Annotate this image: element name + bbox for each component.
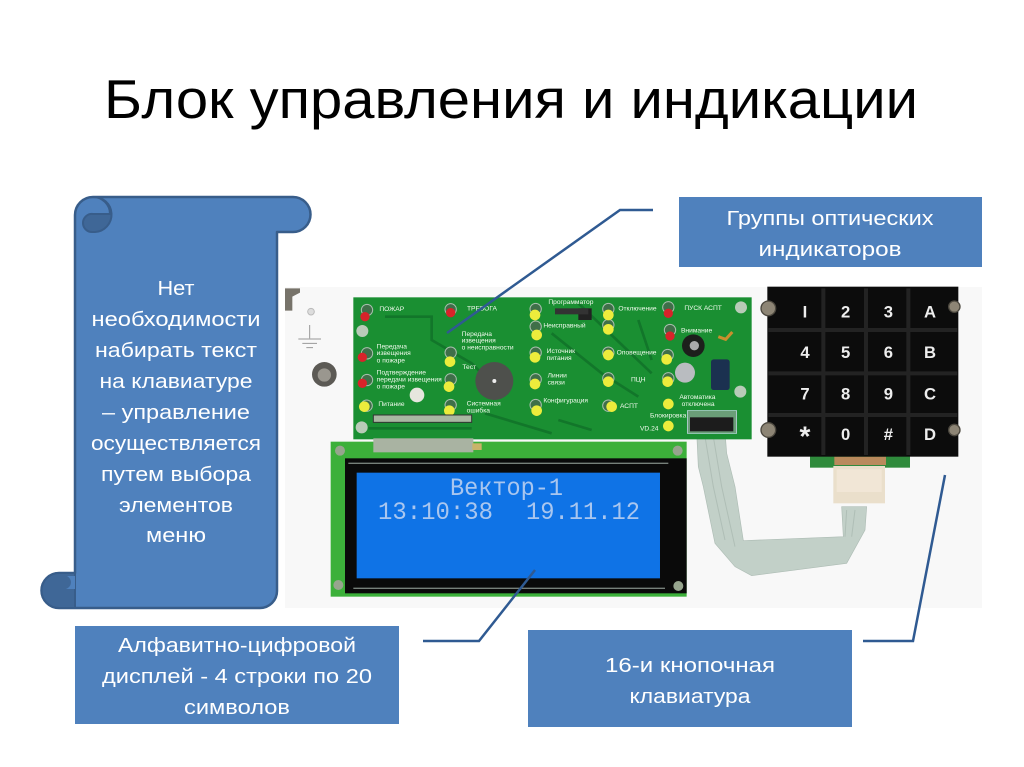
bottom curl [42,573,75,608]
callout: 16-key keypad: клавиатура [630,685,751,708]
panel: scroll callout [42,197,310,608]
board labels: Подтверждение [377,369,426,376]
photo background [285,287,982,608]
16-key keypad: 5 [841,343,850,362]
connector and small board [810,455,910,468]
board labels: АСПТ [620,403,638,410]
scroll text [91,277,261,547]
16-key keypad: # [884,425,893,444]
ribbon cable [697,432,867,576]
callout: optical indicator groups: индикаторов [758,238,902,261]
16-key keypad [761,287,960,503]
key labels: I [803,302,807,321]
callout: 16-key keypad: 16-и кнопочная [605,654,775,677]
leader line: display [423,570,535,641]
board labels: Передача [377,343,407,350]
board labels: Отключение [618,305,657,312]
board labels: питания [547,355,572,362]
mounting holes [356,301,747,433]
scroll shape [42,197,310,608]
scroll text: осуществляется [91,432,261,455]
board labels: связи [548,380,565,387]
board labels: Блокировка [650,413,687,420]
callout: alphanumeric display: Алфавитно-цифровой [118,634,356,657]
LCD text: 13:10:38 [378,498,493,527]
LCD text [378,474,640,527]
buzzer [475,362,513,400]
bottom curl notch [66,576,75,589]
16-key keypad: 6 [884,343,893,362]
board labels: Системная [467,401,501,408]
scroll text: на клавиатуре [100,370,252,393]
board labels: о пожаре [377,384,405,391]
callout: alphanumeric display [75,626,399,724]
callout: optical indicator groups [679,197,982,267]
connector X4 [687,411,737,433]
16-key keypad: 2 [841,302,850,321]
16-key keypad: 9 [884,384,893,403]
16-key keypad: D [924,425,936,444]
board labels: о неисправности [462,344,514,351]
board labels: о пожаре [377,357,405,364]
board labels: передачи извещения [377,377,442,384]
red LEDs [358,308,675,388]
LED sockets [361,302,676,411]
callout: 16-key keypad [528,630,852,727]
photo: control and indication unit [285,287,982,608]
leader line: keypad [863,475,945,641]
board labels: Тест [462,364,476,371]
title: Блок управления и индикации [104,68,918,130]
16-key keypad: * [800,420,811,451]
16-key keypad: 8 [841,384,850,403]
LCD display module [331,438,687,597]
scroll text: набирать текст [95,339,258,362]
top curl [83,197,112,232]
green indicator board [353,297,752,439]
yellow LEDs [359,310,674,431]
board labels: отключена [682,401,715,408]
scroll text: Нет [158,277,195,300]
board labels: Внимание [681,327,713,334]
leader line: optical indicators [447,210,653,333]
blue screen [357,473,660,578]
16-key keypad: C [924,384,936,403]
board labels: Линии [548,373,567,380]
board labels [377,299,722,432]
LCD text: 19.11.12 [526,498,640,527]
LCD text: Вектор-1 [450,474,563,503]
connector X1 [373,415,472,422]
board labels: ТРЕВОГА [467,306,497,313]
16-key keypad: 0 [841,425,850,444]
board labels: Программатор [548,299,594,306]
board labels: ПЦН [631,376,646,383]
board labels: ПУСК АСПТ [684,305,722,312]
scroll text: путем выбора [101,463,252,486]
capacitors and components [410,388,424,402]
board labels: Автоматика [679,394,716,401]
board labels: Конфигурация [543,397,588,404]
board labels: извещения [377,350,411,357]
scroll text: меню [146,524,206,547]
16-key keypad: 4 [800,343,810,362]
16-key keypad: A [924,302,936,321]
board labels: Источник [547,348,575,355]
board labels: ошибка [467,407,490,415]
board labels: извещения [462,338,496,345]
board labels: Неисправный [543,322,586,330]
header pins [373,438,473,452]
board labels: Оповещение [617,350,657,357]
callout: alphanumeric display: символов [184,696,290,719]
board labels: ПОЖАР [379,306,405,313]
screws [761,301,960,437]
board labels: Передача [462,331,492,338]
callout: optical indicator groups: Группы оптических [726,207,934,230]
16-key keypad: 7 [800,384,810,403]
mounting hardware and ground symbol [285,288,337,387]
16-key keypad: 3 [884,302,893,321]
scroll text: – управление [102,401,250,424]
board labels: Питание [378,401,405,408]
board labels: VD.24 [640,425,659,432]
scroll text: необходимости [92,308,260,331]
callout: alphanumeric display: дисплей - 4 строки по 20 [102,665,372,688]
scroll text: элементов [119,494,233,517]
16-key keypad: B [924,343,936,362]
